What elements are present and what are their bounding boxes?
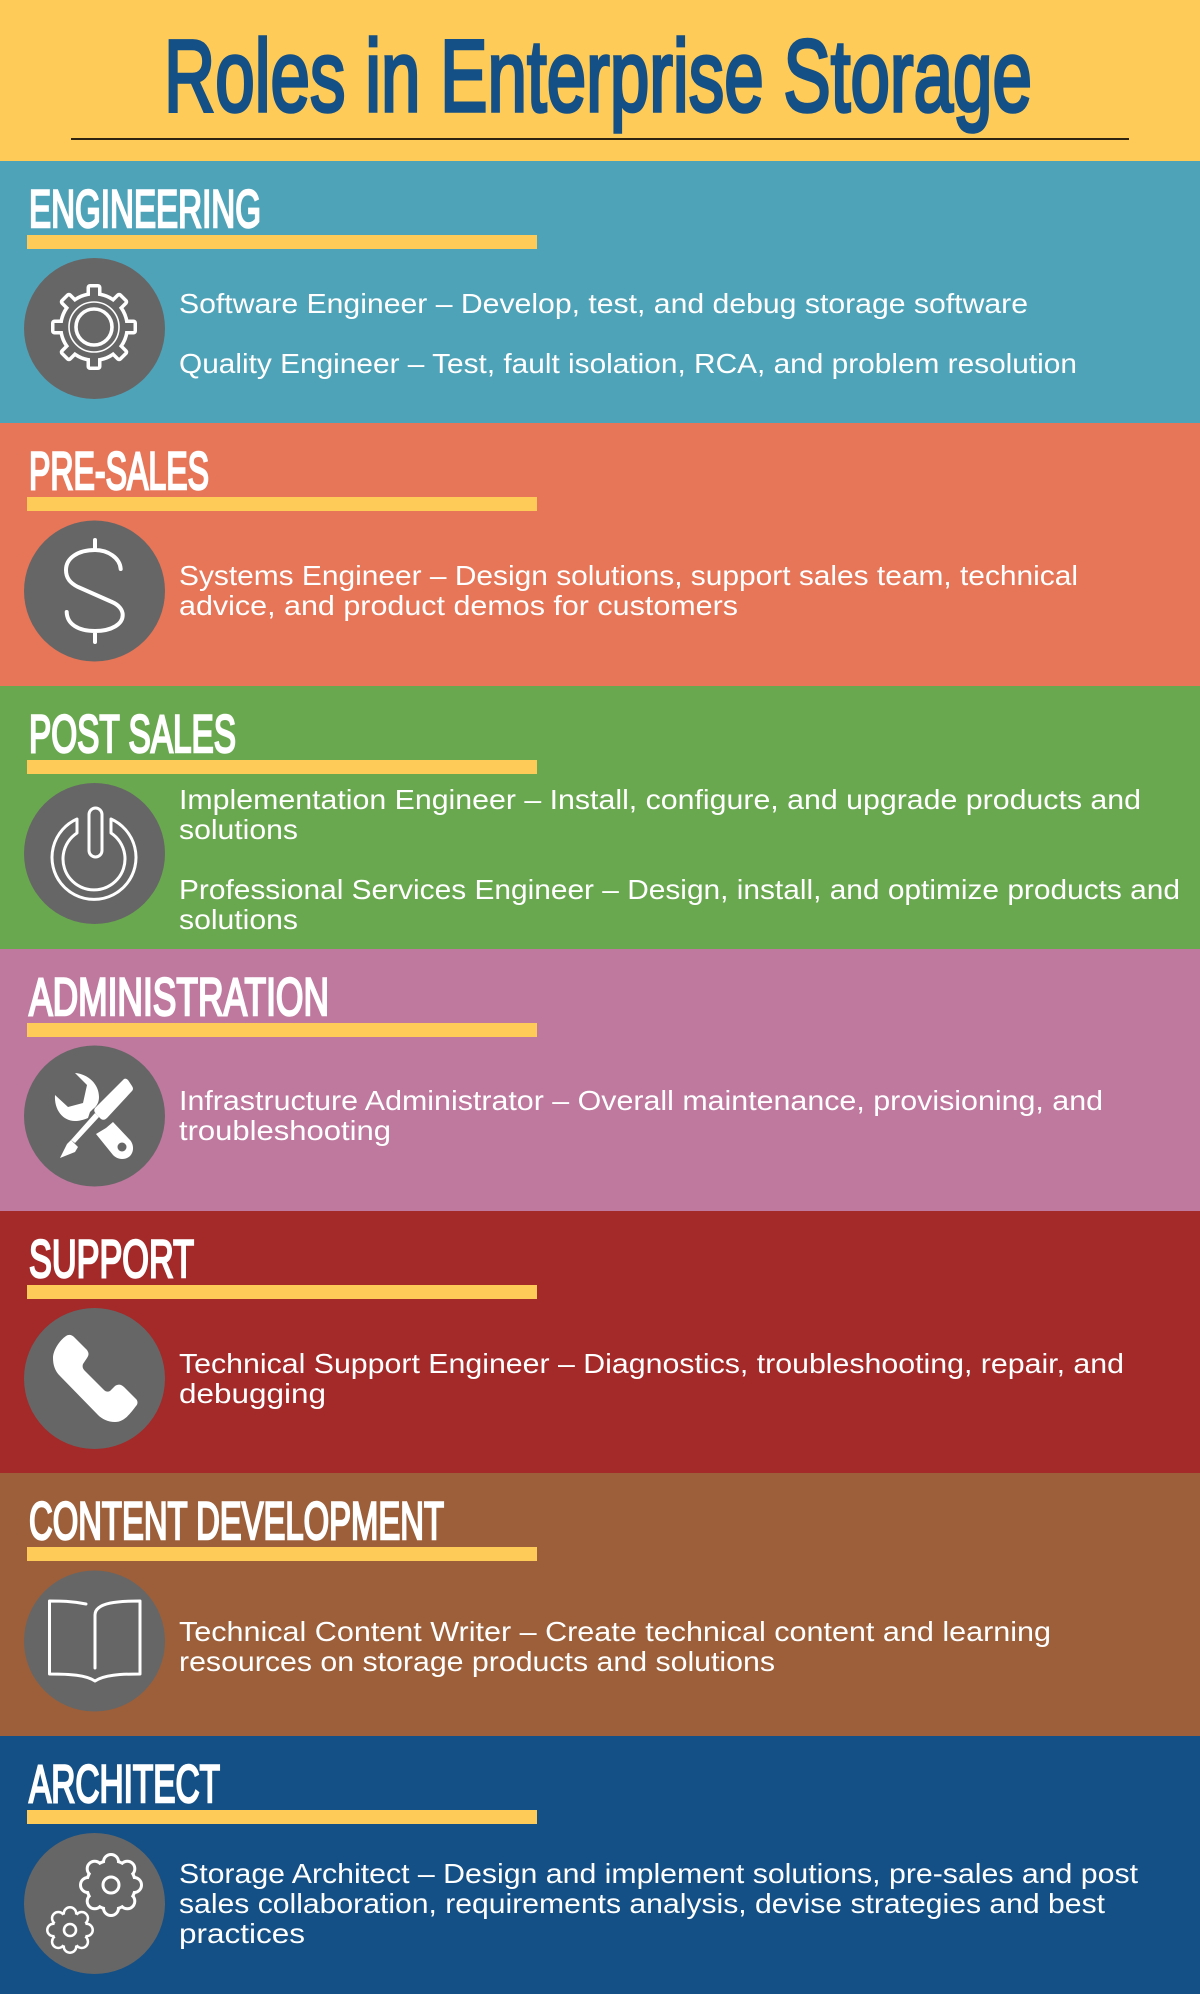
icon: two gears: [24, 1833, 165, 1974]
text: software engineer: Software Engineer – Develop, test, and debug storage software: [179, 288, 1028, 319]
heading bar: [27, 1810, 537, 1824]
heading: administration: ADMINISTRATION: [29, 968, 329, 1027]
panel: administration: [0, 949, 1200, 1211]
text: infrastructure administrator: Infrastructure Administrator – Overall maintenance, provisioning, and: [179, 1085, 1103, 1116]
heading: pre-sales: PRE-SALES: [29, 442, 209, 501]
text: storage architect line 2: sales collaboration, requirements analysis, devise strategies and best: [179, 1888, 1105, 1919]
text: quality engineer: Quality Engineer – Test, fault isolation, RCA, and problem resolution: [179, 348, 1077, 379]
heading bar: [27, 1547, 537, 1561]
heading bar: [27, 1285, 537, 1299]
icon: dollar: [24, 520, 165, 662]
panel: content development: [0, 1473, 1200, 1736]
icon: wrench and screwdriver: [24, 1046, 165, 1186]
text: systems engineer line 2: advice, and product demos for customers: [179, 590, 738, 621]
text: implementation engineer line 2: solutions: [179, 814, 298, 845]
panel: architect: [0, 1736, 1200, 1994]
panel: post sales: [0, 686, 1200, 949]
heading bar: [27, 497, 537, 511]
heading: architect: ARCHITECT: [29, 1755, 220, 1814]
heading bar: [27, 760, 537, 774]
text: technical support engineer line 2: debugging: [179, 1378, 326, 1409]
text: technical support engineer: Technical Support Engineer – Diagnostics, troubleshooting, repair, and: [179, 1348, 1124, 1379]
icon: book: [24, 1570, 165, 1712]
heading bar: [27, 235, 537, 249]
text: professional services engineer: Professional Services Engineer – Design, install, and optimize products and: [179, 874, 1180, 905]
header panel: [0, 0, 1200, 161]
text: systems engineer: Systems Engineer – Design solutions, support sales team, technical: [179, 560, 1078, 591]
text: infrastructure administrator line 2: troubleshooting: [179, 1115, 391, 1146]
text: technical content writer: Technical Content Writer – Create technical content and learning: [179, 1616, 1051, 1647]
panel: pre-sales: [0, 423, 1200, 686]
text: technical content writer line 2: resources on storage products and solutions: [179, 1646, 775, 1677]
text: storage architect: Storage Architect – Design and implement solutions, pre-sales and post: [179, 1858, 1138, 1889]
icon: gear: [24, 258, 165, 399]
panel: support: [0, 1211, 1200, 1473]
text: implementation engineer: Implementation Engineer – Install, configure, and upgrade products and: [179, 784, 1141, 815]
text: professional services engineer line 2: solutions: [179, 904, 298, 935]
icon: power: [24, 783, 165, 924]
heading: support: SUPPORT: [29, 1230, 194, 1289]
heading: engineering: ENGINEERING: [29, 180, 261, 239]
heading: post sales: POST SALES: [29, 705, 236, 764]
heading bar: [27, 1023, 537, 1037]
title underline: [71, 138, 1129, 140]
icon: phone: [24, 1308, 165, 1449]
heading: content development: CONTENT DEVELOPMENT: [29, 1492, 444, 1551]
text: storage architect line 3: practices: [179, 1918, 305, 1949]
panel: engineering: [0, 161, 1200, 423]
